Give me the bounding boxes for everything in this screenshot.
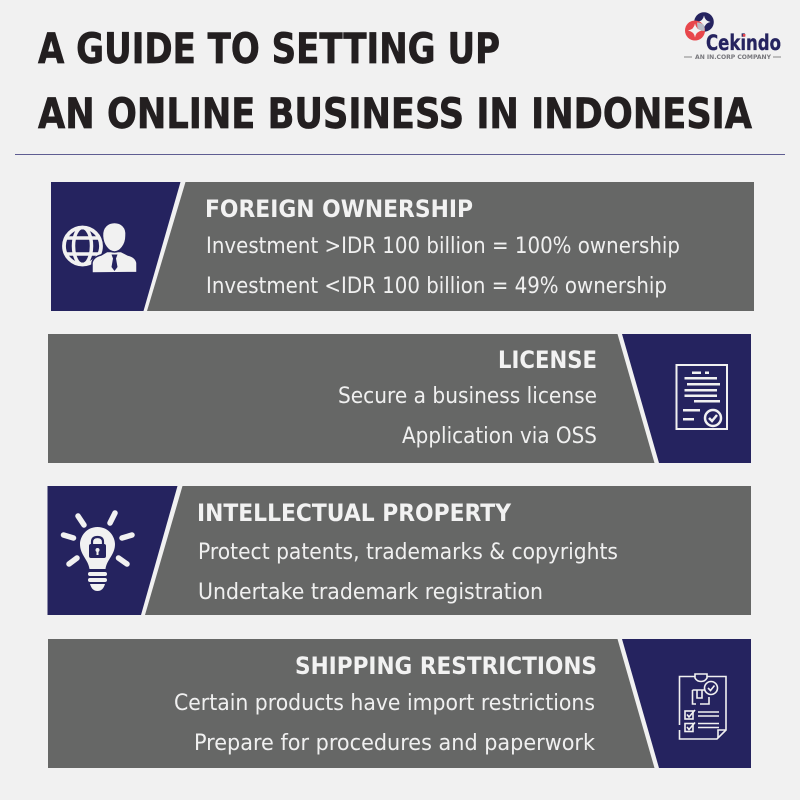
text: import restrictions: Certain products have import restrictions xyxy=(174,691,595,716)
text: application via OSS: Application via OSS xyxy=(402,424,597,449)
heading: shipping restrictions: SHIPPING RESTRICTIONS xyxy=(295,652,597,680)
text: procedures and paperwork: Prepare for procedures and paperwork xyxy=(194,731,595,756)
text: secure license: Secure a business license xyxy=(338,384,597,409)
title xyxy=(38,24,752,138)
heading: foreign ownership: FOREIGN OWNERSHIP xyxy=(205,195,473,223)
title: A GUIDE TO SETTING UP xyxy=(38,24,500,73)
text: trademark registration: Undertake trademark registration xyxy=(198,580,543,605)
navy block: shipping restrictions xyxy=(622,639,751,768)
panel background: license xyxy=(48,334,654,463)
text: protect IP: Protect patents, trademarks & copyrights xyxy=(198,540,618,565)
icon: license document xyxy=(676,365,727,429)
heading: license: LICENSE xyxy=(498,346,597,374)
panel: intellectual property xyxy=(48,486,751,615)
heading: intellectual property: INTELLECTUAL PROPERTY xyxy=(197,499,512,527)
panel background: shipping restrictions xyxy=(48,639,654,768)
panel: shipping restrictions xyxy=(48,639,751,768)
icon: lightbulb with padlock xyxy=(64,513,132,591)
icon: globe and businessperson xyxy=(64,222,137,273)
logo: Cekindo: AN IN.CORP COMPANY xyxy=(695,54,771,61)
text: investment above threshold: Investment >IDR 100 billion = 100% ownership xyxy=(206,234,680,259)
logo: Cekindo xyxy=(684,12,781,61)
panel background: foreign ownership xyxy=(147,182,754,311)
panel background: intellectual property xyxy=(145,486,751,615)
navy block: intellectual property xyxy=(48,486,178,615)
navy block: license xyxy=(622,334,751,463)
panel: license xyxy=(48,334,751,463)
logo: Cekindo: Cekindo xyxy=(706,31,781,55)
navy block: foreign ownership xyxy=(51,182,180,311)
text: investment below threshold: Investment <IDR 100 billion = 49% ownership xyxy=(206,274,667,299)
panel: foreign ownership xyxy=(51,182,754,311)
icon: clipboard checklist xyxy=(680,674,726,739)
